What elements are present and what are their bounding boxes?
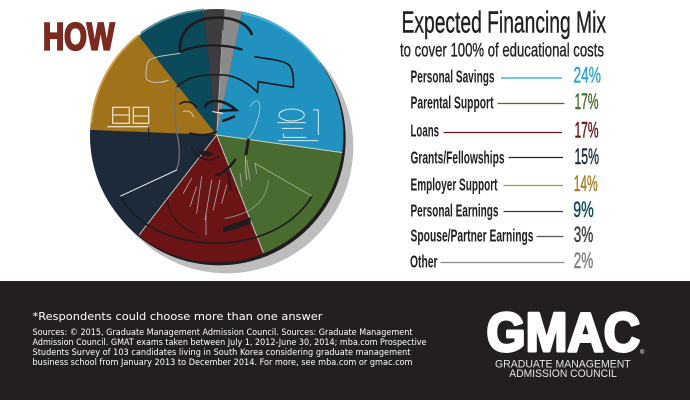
row: Parental Support: 17%	[574, 89, 598, 114]
row: Spouse/Partner Earnings: Spouse/Partner Earnings	[410, 226, 534, 246]
row: Employer Support	[410, 171, 598, 196]
GMAC logo: ADMISSION COUNCIL	[509, 368, 617, 380]
GMAC logo: GMAC	[486, 301, 640, 363]
sources text	[32, 328, 426, 368]
row: Spouse/Partner Earnings: 3%	[574, 222, 593, 247]
left coin characters	[107, 107, 149, 140]
rim highlight	[91, 35, 139, 123]
nose and mouth	[190, 132, 216, 135]
row: Parental Support	[410, 89, 598, 114]
subtitle: to cover 100% of educational costs	[400, 40, 604, 62]
GMAC logo: GRADUATE MANAGEMENT	[495, 359, 631, 371]
row: Loans: Loans	[410, 121, 439, 141]
footer band	[0, 281, 690, 400]
row: Loans: 17%	[574, 117, 598, 142]
row: Other: 2%	[574, 248, 593, 273]
row: Personal Earnings: 9%	[573, 197, 594, 222]
pie drop shadow	[100, 20, 353, 273]
row: Personal Earnings: Personal Earnings	[410, 201, 499, 221]
eyes and brows	[205, 101, 236, 111]
sources text: business school from January 2013 to December 2014. For more, see mba.com or gmac.com	[32, 358, 412, 368]
row: Grants/Fellowships: 15%	[574, 144, 599, 169]
row: Parental Support: Parental Support	[410, 92, 494, 112]
moustache and beard	[217, 160, 235, 175]
hat crown	[180, 18, 252, 52]
row: Personal Earnings	[410, 197, 594, 222]
right coin characters	[277, 109, 318, 141]
GMAC logo: ®	[640, 349, 645, 356]
sources text: Sources: © 2015, Graduate Management Admission Council. Sources: Graduate Management	[32, 328, 413, 338]
row: Personal Savings: Personal Savings	[410, 66, 495, 86]
row: Grants/Fellowships	[410, 144, 599, 169]
robe collar arcs	[121, 197, 312, 243]
row: Loans	[410, 117, 598, 142]
row: Personal Savings	[410, 63, 601, 88]
row: Other	[410, 248, 593, 273]
pie chart: financing mix coin	[90, 8, 354, 274]
row: Other: Other	[410, 252, 438, 272]
face outline	[175, 87, 179, 169]
hat brim	[146, 53, 180, 82]
headline word: HOW: HOW	[43, 16, 115, 58]
row: Grants/Fellowships: Grants/Fellowships	[410, 147, 505, 167]
sources text: Admission Council. GMAT exams taken between July 1, 2012-June 30, 2014; mba.com Prospective	[32, 338, 426, 348]
row: Personal Savings: 24%	[574, 63, 601, 88]
sources text: Students Survey of 103 candidates living in South Korea considering graduate management	[32, 348, 411, 358]
footnote: *Respondents could choose more than one answer	[32, 310, 323, 323]
pie wedges	[90, 9, 344, 262]
pie dark rim	[92, 12, 346, 265]
row: Employer Support: 14%	[574, 171, 598, 196]
face engraving	[121, 18, 312, 243]
row: Employer Support: Employer Support	[410, 175, 498, 195]
